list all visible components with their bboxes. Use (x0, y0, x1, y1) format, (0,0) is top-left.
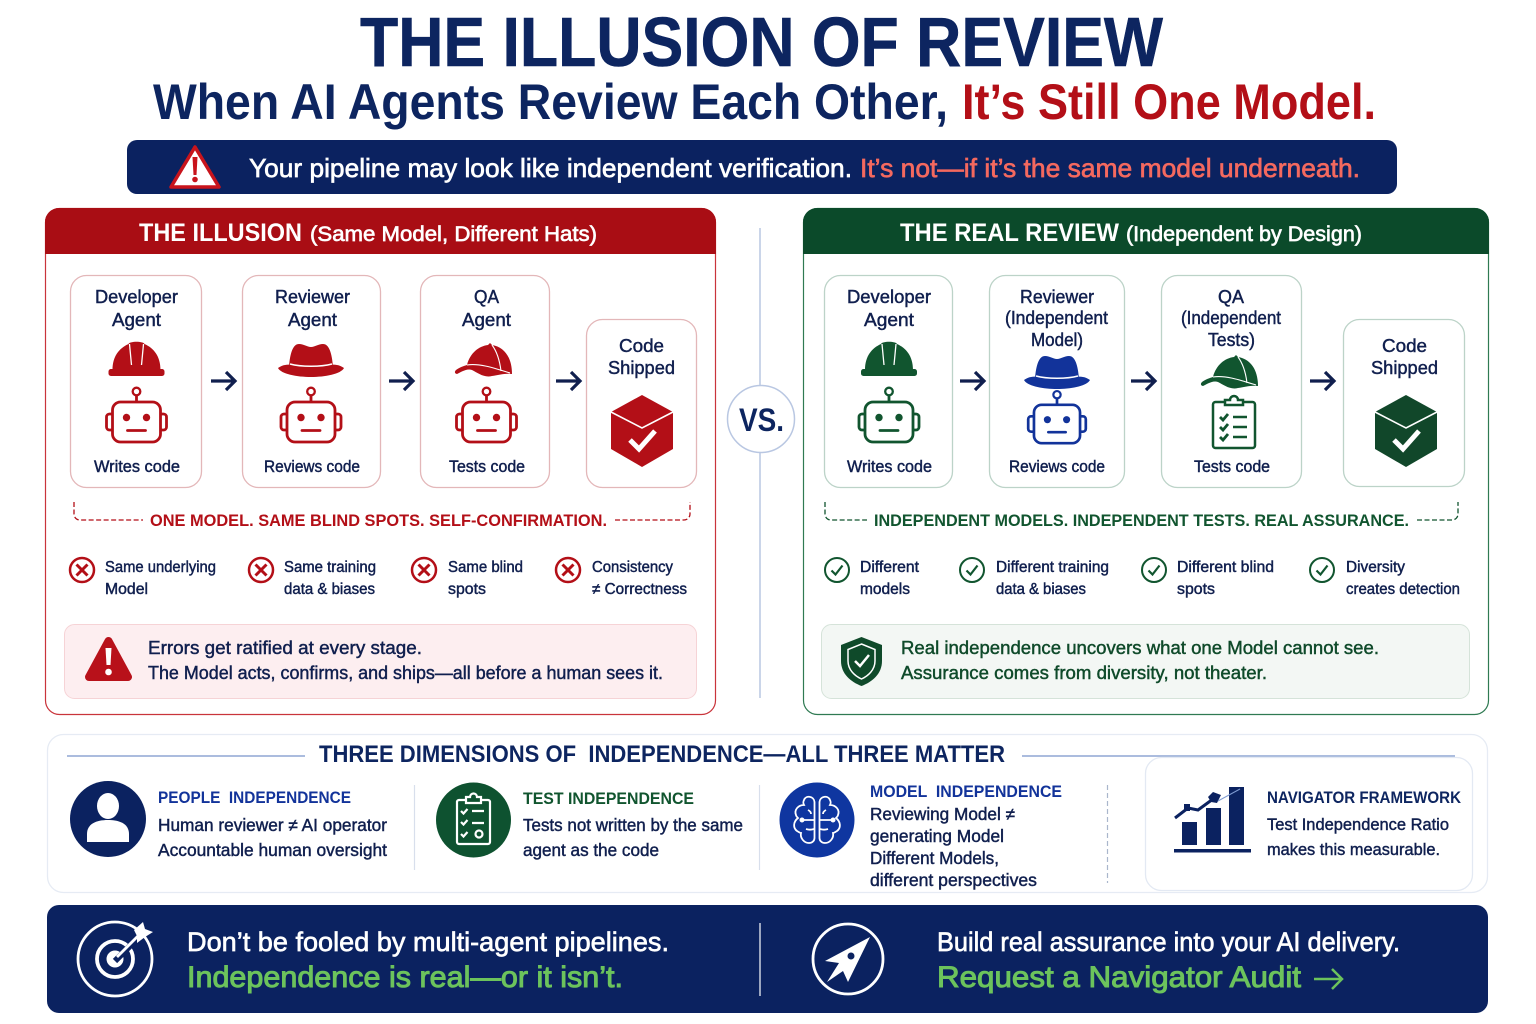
dimension: test independence (436, 782, 743, 860)
icon: green package (1375, 395, 1437, 467)
dimension: model independence: different perspectives (870, 870, 1037, 890)
dimension: people independence: PEOPLE INDEPENDENCE (158, 788, 351, 807)
dimension: people independence: Human reviewer ≠ AI operator (158, 815, 387, 835)
card: developer agent (70, 276, 202, 488)
icon: red fedora (278, 344, 344, 377)
icon: red robot (106, 388, 166, 442)
card: code shipped: Code (1382, 336, 1427, 356)
card: developer agent: Agent (864, 310, 914, 330)
card: independent qa: Tests) (1208, 330, 1255, 350)
card: independent qa: (Independent (1181, 308, 1281, 328)
item: same training data: data & biases (284, 581, 375, 598)
item: different training data: data & biases (996, 581, 1086, 598)
dashed bracket with summary: ONE MODEL. SAME BLIND SPOTS. SELF-CONFIRMATION. (150, 512, 607, 530)
dimension: model independence: generating Model (870, 826, 1004, 846)
footer call-to-action bar (47, 905, 1488, 1013)
card: independent reviewer (990, 276, 1124, 488)
panel: the illusion (45, 208, 716, 714)
card: navigator framework (1146, 758, 1472, 890)
panel: the real review (803, 208, 1489, 714)
icon: red robot (456, 388, 516, 442)
item: diversity creates detection (1310, 558, 1460, 598)
icon: green shield (841, 637, 882, 686)
dashed bracket with summary (74, 502, 690, 530)
cta text: request audit: Request a Navigator Audit (937, 961, 1302, 994)
item: same blind spots: spots (448, 581, 486, 598)
panel header: the real review (803, 208, 1489, 254)
cta text: independence: Don’t be fooled by multi-agent pipelines. (187, 927, 669, 957)
card: qa agent: Agent (462, 310, 511, 330)
item: different training data (960, 558, 1109, 598)
divider with VS badge (728, 228, 794, 698)
card: developer agent: Developer (95, 287, 178, 307)
panel header: the illusion: THE ILLUSION (139, 219, 302, 247)
cta text: independence (187, 927, 669, 994)
cta text: independence: Independence is real—or it isn’t. (187, 961, 623, 994)
icon: banner warning triangle (171, 147, 219, 187)
item: different blind spots: Different blind (1177, 559, 1274, 576)
arrow (1131, 372, 1155, 390)
card: developer agent: Developer (847, 287, 931, 307)
cta text: request audit (937, 927, 1400, 994)
card: developer agent: Writes code (94, 458, 180, 476)
icon: green hard hat (861, 342, 917, 376)
dimension: test independence: agent as the code (523, 840, 659, 860)
card: reviewer agent: Agent (288, 310, 337, 330)
card: navigator framework: NAVIGATOR FRAMEWORK (1267, 788, 1462, 807)
item: different blind spots: spots (1177, 581, 1215, 598)
card: independent qa (1162, 276, 1302, 488)
card: navigator framework: Test Independence Ratio (1267, 815, 1449, 834)
arrow (556, 372, 580, 390)
heading: three dimensions: THREE DIMENSIONS OF INDEPENDENCE—ALL THREE MATTER (319, 741, 1005, 768)
card: navigator framework: makes this measurable. (1267, 840, 1440, 859)
icon: green checklist clipboard (1213, 396, 1255, 448)
item: different models: Different (860, 559, 920, 576)
warning banner: It’s not—if it’s the same model underneath. (860, 153, 1360, 183)
card: code shipped: Code (619, 336, 664, 356)
dashed bracket with summary (825, 502, 1458, 530)
item: diversity creates detection: Diversity (1346, 559, 1405, 576)
dimension: test independence: TEST INDEPENDENCE (523, 789, 694, 808)
item: consistency not correctness: Consistency (592, 559, 673, 576)
item: same underlying model: Model (105, 581, 148, 598)
callout: errors ratified (64, 624, 696, 698)
item: different models: models (860, 581, 910, 598)
callout: errors ratified: The Model acts, confirms, and ships—all before a human sees it. (148, 662, 663, 683)
item: same blind spots (412, 558, 523, 598)
item: different training data: Different training (996, 559, 1109, 576)
item: different blind spots (1142, 558, 1274, 598)
card: independent qa: Tests code (1194, 458, 1270, 476)
icon: red robot (281, 388, 341, 442)
warning banner (127, 140, 1397, 194)
card: independent qa: QA (1218, 287, 1244, 307)
subtitle: When AI Agents Review Each Other, (153, 74, 948, 130)
card: reviewer agent: Reviewer (275, 287, 350, 307)
card: qa agent (420, 276, 550, 488)
item: consistency not correctness: ≠ Correctness (592, 581, 687, 598)
panel: three dimensions (48, 734, 1488, 892)
item: same underlying model: Same underlying (105, 559, 216, 576)
icon: green cap (1201, 355, 1258, 388)
card: code shipped: Shipped (1371, 358, 1438, 378)
icon: brain (780, 782, 854, 858)
item: diversity creates detection: creates detection (1346, 581, 1460, 598)
icon: person (70, 781, 146, 857)
icon: clipboard on green (436, 782, 511, 858)
callout: real independence: Assurance comes from diversity, not theater. (901, 662, 1267, 683)
icon: rising bar chart (1174, 787, 1251, 852)
icon: red hard hat (108, 342, 164, 376)
arrow (389, 372, 413, 390)
title: THE ILLUSION OF REVIEW (360, 3, 1163, 81)
card: reviewer agent: Reviews code (264, 458, 360, 476)
dimension: model independence: Different Models, (870, 848, 999, 868)
card: independent reviewer: Model) (1031, 330, 1083, 350)
icon: green arrow (1314, 969, 1342, 989)
icon: compass navigator (813, 924, 883, 994)
card: code shipped: Shipped (608, 358, 675, 378)
dimension: test independence: Tests not written by the same (523, 815, 743, 835)
subtitle: It’s Still One Model. (962, 74, 1376, 130)
icon: red package (611, 395, 673, 467)
card: developer agent (824, 276, 952, 488)
card: code shipped (586, 320, 696, 488)
icon: red warning triangle (89, 641, 128, 677)
dimension: model independence (780, 782, 1062, 890)
dimension: people independence: Accountable human oversight (158, 840, 387, 860)
arrow (1310, 372, 1334, 390)
card: developer agent: Writes code (847, 458, 932, 476)
panel header: the illusion (45, 208, 716, 254)
panel header: the illusion: (Same Model, Different Hats) (310, 223, 597, 246)
callout: real independence: Real independence uncovers what one Model cannot see. (901, 637, 1379, 658)
card: independent reviewer: Reviewer (1020, 287, 1094, 307)
cta text: request audit: Build real assurance into your AI delivery. (937, 927, 1400, 957)
warning banner: Your pipeline may look like independent verification. (249, 153, 852, 183)
card: qa agent: Tests code (449, 458, 525, 476)
card: qa agent: QA (474, 287, 499, 307)
item: same training data: Same training (284, 559, 376, 576)
callout: real independence (822, 624, 1470, 698)
item: different models (825, 558, 920, 598)
icon: blue robot (1028, 391, 1086, 443)
card: independent reviewer: (Independent (1005, 308, 1108, 328)
icon: target with dart (78, 922, 153, 996)
card: independent reviewer: Reviews code (1009, 458, 1105, 476)
card: reviewer agent (242, 276, 380, 488)
panel header: the real review: THE REAL REVIEW (900, 219, 1119, 247)
item: same training data (249, 558, 376, 598)
divider with VS badge: VS. (739, 402, 784, 438)
item: consistency not correctness (556, 558, 687, 598)
card: developer agent: Agent (112, 310, 161, 330)
dashed bracket with summary: INDEPENDENT MODELS. INDEPENDENT TESTS. REAL ASSURANCE. (874, 512, 1409, 530)
card: code shipped (1344, 320, 1464, 486)
panel header: the real review: (Independent by Design) (1126, 223, 1362, 246)
dimension: model independence: Reviewing Model ≠ (870, 804, 1015, 824)
icon: red cap (455, 343, 512, 376)
dimension: people independence (70, 781, 387, 860)
arrow (960, 372, 984, 390)
item: same underlying model (70, 558, 216, 598)
item: same blind spots: Same blind (448, 559, 523, 576)
arrow (211, 372, 235, 390)
icon: green robot (859, 388, 919, 442)
callout: errors ratified: Errors get ratified at every stage. (148, 637, 422, 658)
icon: blue fedora (1024, 356, 1090, 389)
dimension: model independence: MODEL INDEPENDENCE (870, 782, 1062, 801)
